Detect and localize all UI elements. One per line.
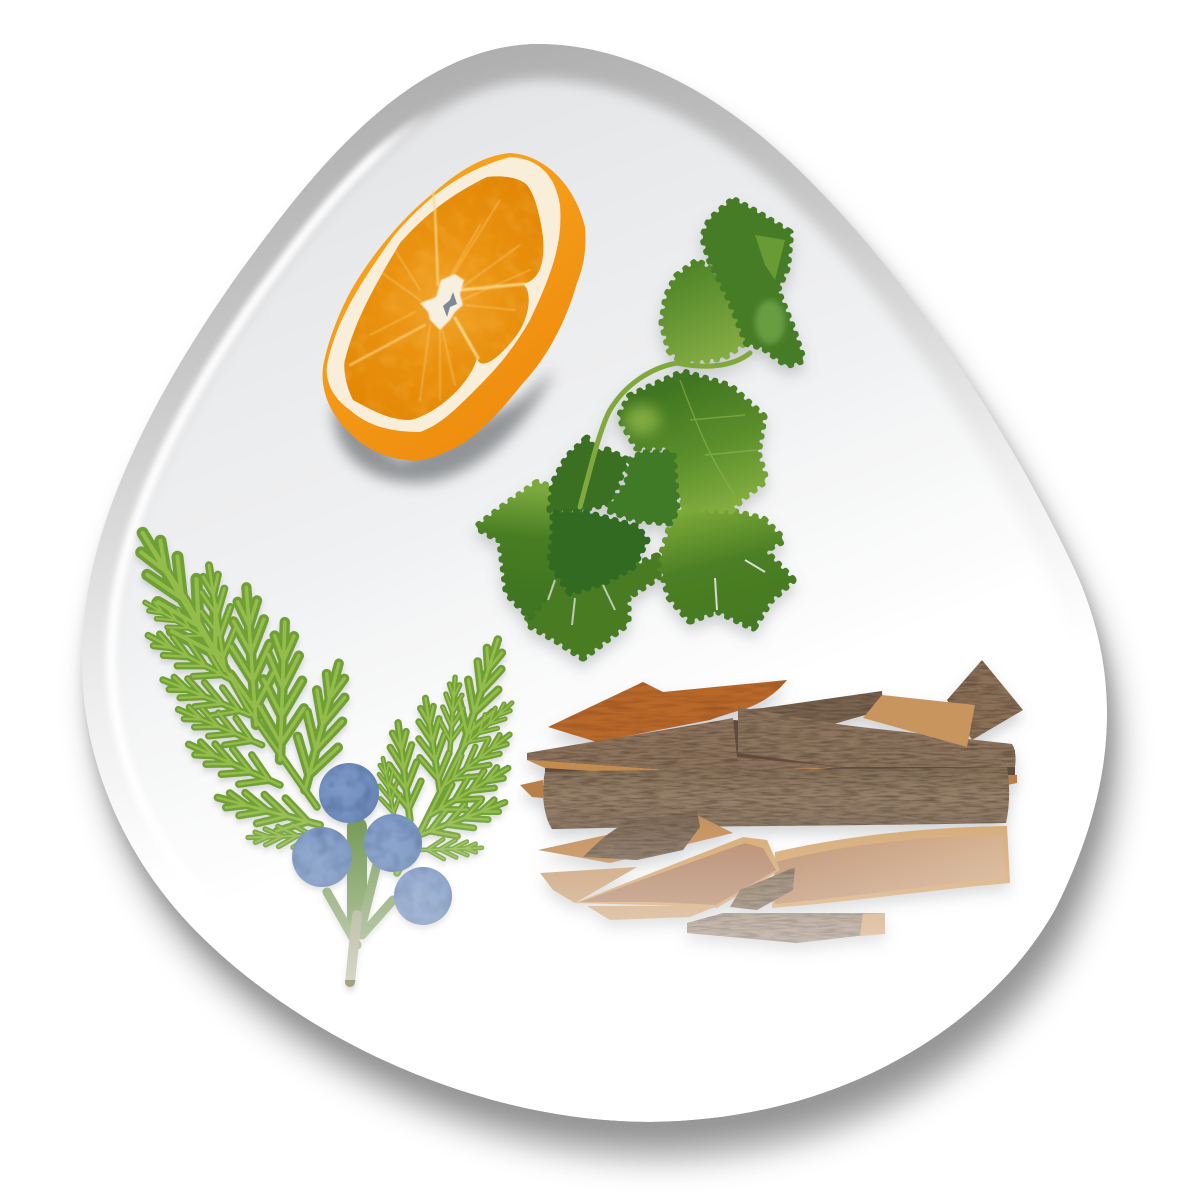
cilantro sprig xyxy=(477,200,803,657)
leaf: top right xyxy=(703,200,803,365)
orange flesh xyxy=(344,176,543,420)
bark: back upper xyxy=(737,691,883,725)
berry 4 xyxy=(394,867,452,925)
piece: under xyxy=(540,867,637,903)
orange slice xyxy=(322,153,586,483)
bark: bottom xyxy=(687,913,883,943)
leaf: centre fold xyxy=(607,453,677,523)
rim highlight xyxy=(106,115,422,784)
plate bowl xyxy=(120,73,1016,672)
orange shadow xyxy=(334,370,555,483)
leaf: centre dark xyxy=(548,513,647,625)
curl: right edge xyxy=(772,826,1010,908)
plate xyxy=(82,44,1107,1122)
lower plate fade xyxy=(160,814,1072,980)
berry 3 xyxy=(364,814,422,872)
bark: small xyxy=(730,867,795,910)
cilantro stem xyxy=(580,353,750,507)
leaf: behind stem xyxy=(550,438,627,510)
lower stem xyxy=(327,827,393,982)
piece: bottom under xyxy=(587,906,717,920)
leaf: upper left xyxy=(663,262,747,362)
berry 1 xyxy=(319,763,379,823)
orange pith xyxy=(327,157,560,432)
bark: rock xyxy=(583,810,700,860)
right frond xyxy=(373,634,519,873)
bark: upper xyxy=(738,707,1016,767)
berry 2 xyxy=(292,827,352,887)
tail: right xyxy=(1005,775,1017,785)
orange segment lines xyxy=(350,192,530,400)
bark: dark orange xyxy=(548,680,787,742)
orange peel xyxy=(322,153,586,461)
juniper sprig xyxy=(121,520,519,982)
plate drop shadow xyxy=(87,57,1119,1158)
cinnamon underlay xyxy=(545,720,1015,790)
tail: left xyxy=(520,780,543,798)
bark: bottom end xyxy=(860,913,885,936)
curl: right interior xyxy=(775,835,1006,904)
orange centre xyxy=(420,274,464,330)
leaf: large middle xyxy=(620,373,765,510)
piece: lower orange xyxy=(538,815,733,863)
piece: flat interior xyxy=(580,843,776,905)
leaf: left xyxy=(477,483,557,617)
cinnamon pieces xyxy=(520,660,1023,943)
orange core mark xyxy=(443,292,457,317)
left frond xyxy=(121,520,359,849)
bark: long left edge xyxy=(527,760,843,778)
leaf: bottom xyxy=(527,557,657,657)
cinnamon tube xyxy=(543,767,1009,829)
bark: long left xyxy=(527,718,843,772)
leaf: lower right xyxy=(660,507,792,627)
piece: flat edge xyxy=(575,837,780,908)
piece: light xyxy=(863,695,975,747)
plate rim xyxy=(82,44,1107,1122)
juniper berries xyxy=(292,763,452,925)
bark: back right xyxy=(947,660,1023,740)
